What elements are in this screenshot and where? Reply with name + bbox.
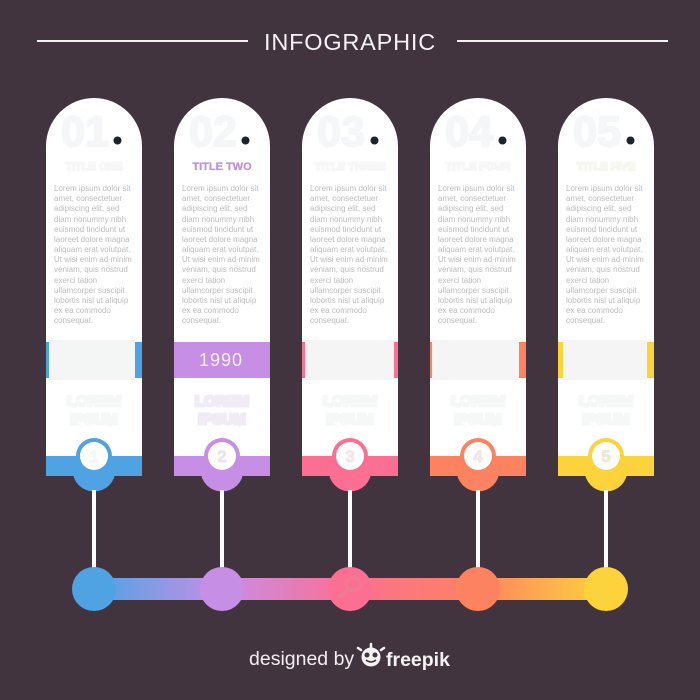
panel: step 1: laoreet dolore magna xyxy=(54,235,130,244)
panel: step 4: lobortis nisl ut aliquip xyxy=(438,296,513,305)
panel: step 2: 02 xyxy=(189,108,237,156)
panel: step 3: veniam, quis nostrud xyxy=(310,265,384,274)
panel: step 3: TITLE THREE xyxy=(315,161,385,173)
panel: step 2: euismod tincidunt ut xyxy=(182,225,254,234)
panel: step 4: Ut wisi enim ad minim xyxy=(438,255,516,264)
panel: step 2: adipiscing elit, sed xyxy=(182,204,247,213)
panel: step 1: aliquam erat volutpat. xyxy=(54,245,130,254)
panel: step 4: Lorem ipsum dolor sit xyxy=(438,184,515,193)
panel: step 2: diam nonummy nibh xyxy=(182,215,254,224)
panel: step 1: IPSUM xyxy=(70,411,118,428)
panel: step 3 xyxy=(302,98,398,492)
panel: step 1: TITLE ONE xyxy=(65,161,123,173)
panel: step 2: 2 xyxy=(217,447,227,466)
panel: step 1: diam nonummy nibh xyxy=(54,215,126,224)
timeline xyxy=(72,490,628,611)
panel: step 1: veniam, quis nostrud xyxy=(54,265,128,274)
panel: step 1: 1 xyxy=(89,447,99,466)
panel: step 2 xyxy=(174,98,270,492)
panel: step 2: ullamcorper suscipit xyxy=(182,286,253,295)
panel: step 3: 03 xyxy=(317,108,365,156)
credit: designed by freepik: designed by xyxy=(249,648,354,670)
panel: step 3: laoreet dolore magna xyxy=(310,235,386,244)
panel: step 1: ullamcorper suscipit xyxy=(54,286,125,295)
panel: step 2: TITLE TWO xyxy=(192,161,252,173)
panel: step 5: laoreet dolore magna xyxy=(566,235,642,244)
panel: step 1: Lorem ipsum dolor sit xyxy=(54,184,131,193)
panel: step 3: ex ea commodo xyxy=(310,306,367,315)
panel: step 2: laoreet dolore magna xyxy=(182,235,258,244)
panel: step 1: amet, consectetuer xyxy=(54,194,122,203)
credit: designed by freepik xyxy=(249,644,450,671)
panel: step 5: TITLE FIVE xyxy=(577,161,635,173)
panel: step 4: euismod tincidunt ut xyxy=(438,225,510,234)
panel: step 5: veniam, quis nostrud xyxy=(566,265,640,274)
panel: step 4: IPSUM xyxy=(454,411,502,428)
panel: step 3: euismod tincidunt ut xyxy=(310,225,382,234)
panel: step 1: exerci tation xyxy=(54,276,97,285)
panel: step 4 xyxy=(430,98,526,492)
panel: step 1: lobortis nisl ut aliquip xyxy=(54,296,129,305)
panel: step 5: IPSUM xyxy=(582,411,630,428)
panel: step 4: ullamcorper suscipit xyxy=(438,286,509,295)
panel: step 3: adipiscing elit, sed xyxy=(310,204,375,213)
panel: step 4: 04 xyxy=(445,108,493,156)
panel: step 1: 01 xyxy=(61,108,109,156)
panel: step 4: amet, consectetuer xyxy=(438,194,506,203)
panel: step 3: 3 xyxy=(345,447,355,466)
panel: step 1: euismod tincidunt ut xyxy=(54,225,126,234)
panel: step 4: TITLE FOUR xyxy=(446,161,510,173)
credit: designed by freepik: freepik xyxy=(386,649,450,671)
panel: step 5: aliquam erat volutpat. xyxy=(566,245,642,254)
panel: step 2: lobortis nisl ut aliquip xyxy=(182,296,257,305)
panel: step 5: Ut wisi enim ad minim xyxy=(566,255,644,264)
panel: step 5: Lorem ipsum dolor sit xyxy=(566,184,643,193)
panel: step 4: veniam, quis nostrud xyxy=(438,265,512,274)
icon: magnifier xyxy=(340,578,360,597)
panel: step 3: IPSUM xyxy=(326,411,374,428)
panel: step 2: aliquam erat volutpat. xyxy=(182,245,258,254)
panel: step 1: adipiscing elit, sed xyxy=(54,204,119,213)
panel: step 2: consequat. xyxy=(182,316,221,325)
panel: step 5 xyxy=(558,98,654,492)
panel: step 5: adipiscing elit, sed xyxy=(566,204,631,213)
panel: step 4: adipiscing elit, sed xyxy=(438,204,503,213)
panel: step 5: euismod tincidunt ut xyxy=(566,225,638,234)
panel: step 3: amet, consectetuer xyxy=(310,194,378,203)
panel: step 2: IPSUM xyxy=(198,411,246,428)
panel: step 2: veniam, quis nostrud xyxy=(182,265,256,274)
panel: step 4: 4 xyxy=(473,447,483,466)
panel: step 3: Lorem ipsum dolor sit xyxy=(310,184,387,193)
icon: freepik mascot xyxy=(358,644,384,666)
panel: step 5: 05 xyxy=(573,108,621,156)
panel: step 2: Lorem ipsum dolor sit xyxy=(182,184,259,193)
panel: step 1: Ut wisi enim ad minim xyxy=(54,255,132,264)
panel: step 4: diam nonummy nibh xyxy=(438,215,510,224)
title: INFOGRAPHIC xyxy=(264,29,436,55)
panel: step 1: LOREM xyxy=(67,393,121,410)
panel: step 4: LOREM xyxy=(451,393,505,410)
panel: step 2: ex ea commodo xyxy=(182,306,239,315)
panel: step 5: LOREM xyxy=(579,393,633,410)
panel: step 3: LOREM xyxy=(323,393,377,410)
panel: step 1: ex ea commodo xyxy=(54,306,111,315)
panel: step 5: ullamcorper suscipit xyxy=(566,286,637,295)
panel: step 1: consequat. xyxy=(54,316,93,325)
panel: step 5: 5 xyxy=(601,447,611,466)
panel: step 2: amet, consectetuer xyxy=(182,194,250,203)
panel: step 3: consequat. xyxy=(310,316,349,325)
panel: step 5: lobortis nisl ut aliquip xyxy=(566,296,641,305)
panel: step 3: Ut wisi enim ad minim xyxy=(310,255,388,264)
panel: step 4: ex ea commodo xyxy=(438,306,495,315)
panel: step 2: LOREM xyxy=(195,393,249,410)
panel: step 5: diam nonummy nibh xyxy=(566,215,638,224)
panel: step 5: ex ea commodo xyxy=(566,306,623,315)
panel: step 4: aliquam erat volutpat. xyxy=(438,245,514,254)
panel: step 5: exerci tation xyxy=(566,276,609,285)
panel: step 3: ullamcorper suscipit xyxy=(310,286,381,295)
panel: step 2: exerci tation xyxy=(182,276,225,285)
panel: step 3: aliquam erat volutpat. xyxy=(310,245,386,254)
panel: step 3: exerci tation xyxy=(310,276,353,285)
panel: step 5: amet, consectetuer xyxy=(566,194,634,203)
panel: step 3: lobortis nisl ut aliquip xyxy=(310,296,385,305)
panel: step 4: laoreet dolore magna xyxy=(438,235,514,244)
panel: step 2: 1990 xyxy=(199,350,243,370)
panel: step 5: consequat. xyxy=(566,316,605,325)
panel: step 1 xyxy=(46,98,142,492)
panel: step 4: consequat. xyxy=(438,316,477,325)
panel: step 4: exerci tation xyxy=(438,276,481,285)
panel: step 3: diam nonummy nibh xyxy=(310,215,382,224)
panel: step 2: Ut wisi enim ad minim xyxy=(182,255,260,264)
